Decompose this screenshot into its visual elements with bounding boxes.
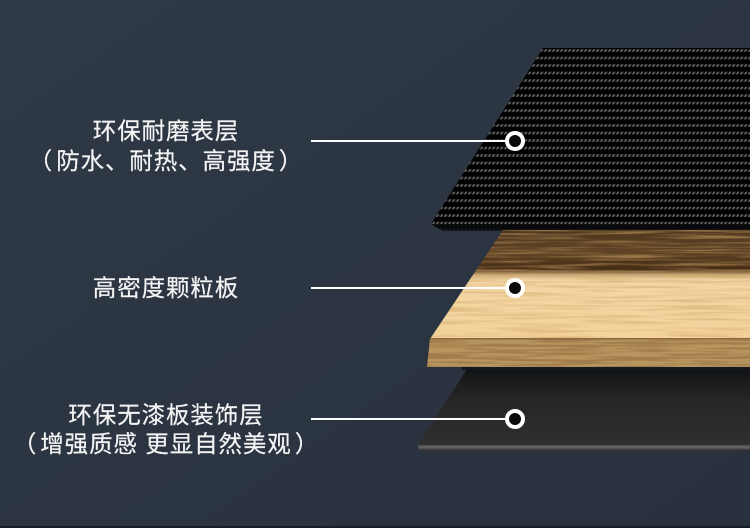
- label: wear surface: 防水、耐热、高强度）: [56, 148, 303, 174]
- callout: decorative sheet: [13, 402, 523, 457]
- callout: particle board: [93, 275, 523, 301]
- label: wear surface: 环保耐磨表层: [93, 118, 239, 144]
- callout: wear surface: [29, 118, 523, 174]
- label: particle board: 高密度颗粒板: [93, 275, 239, 301]
- label: decorative sheet: 增强质感 更显自然美观）: [40, 431, 319, 457]
- layer: melamine decorative sheet: [418, 367, 750, 451]
- wood front edge: [427, 339, 750, 367]
- wood top face: [425, 228, 750, 342]
- label: wear surface: （: [29, 148, 53, 174]
- label: decorative sheet: 环保无漆板装饰层: [68, 402, 264, 428]
- layer: black embossed wear surface: [425, 44, 750, 236]
- bottom dark strip: [0, 526, 750, 528]
- layer: particle board wood: [425, 228, 750, 369]
- label: decorative sheet: （: [13, 431, 37, 457]
